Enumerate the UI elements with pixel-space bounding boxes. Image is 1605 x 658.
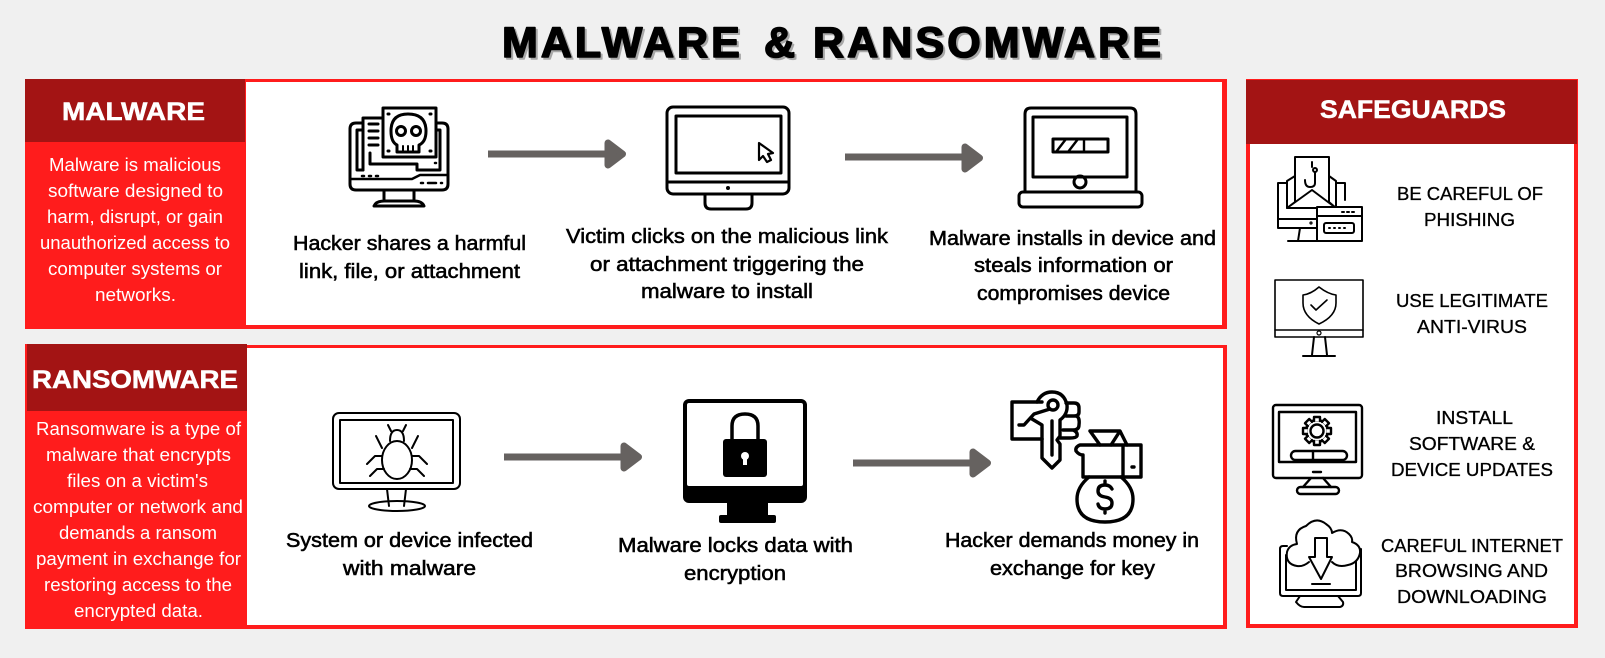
step text: ransomware 1: with malware <box>342 558 476 580</box>
step text: ransomware 2: Malware locks data with <box>618 535 853 557</box>
ransomware description box: Ransomware is a type of <box>36 419 242 439</box>
ransomware description box: restoring access to the <box>44 575 232 595</box>
text: be careful of phishing: PHISHING <box>1424 210 1515 230</box>
malware description box: computer systems or <box>48 259 222 279</box>
ransomware description box: demands a ransom <box>59 523 217 543</box>
ransomware description box <box>25 344 247 629</box>
ransomware description box: computer or network and <box>33 497 243 517</box>
icon: cloud download monitor <box>1280 520 1361 607</box>
step text: malware 3: compromises device <box>977 283 1170 305</box>
text: install software and updates: INSTALL <box>1436 408 1513 428</box>
icon: lock on monitor <box>683 399 807 523</box>
icon: shield monitor <box>1275 280 1363 356</box>
step text: ransomware 3 <box>945 530 1199 580</box>
step text: ransomware 2 <box>618 535 853 585</box>
safeguards heading <box>1246 80 1577 144</box>
icon: skull on monitor <box>350 108 448 206</box>
malware steps frame <box>244 79 1227 329</box>
ransomware description box: encrypted data. <box>74 601 203 621</box>
text: use legitimate anti-virus <box>1396 291 1548 337</box>
step text: malware 2: or attachment triggering the <box>590 254 864 276</box>
step text: malware 1 <box>293 233 526 283</box>
malware description box <box>25 79 245 329</box>
text: careful browsing and downloading: BROWSING AND <box>1395 561 1548 581</box>
text: careful browsing and downloading: CAREFUL INTERNET <box>1381 536 1563 556</box>
text: use legitimate anti-virus: ANTI-VIRUS <box>1417 317 1527 337</box>
arrow 4 <box>853 452 988 474</box>
panel: malware <box>25 79 1227 329</box>
icon: phishing <box>1278 157 1362 241</box>
malware description box: MALWARE <box>62 98 205 126</box>
step text: malware 3 <box>929 228 1216 305</box>
malware description box: networks. <box>95 285 176 305</box>
text: install software and updates <box>1391 408 1553 480</box>
text: be careful of phishing: BE CAREFUL OF <box>1397 184 1543 204</box>
malware description box: software designed to <box>48 181 223 201</box>
malware description box: harm, disrupt, or gain <box>47 207 223 227</box>
step text: malware 1: Hacker shares a harmful <box>293 233 526 255</box>
step text: malware 2 <box>566 226 889 303</box>
step text: malware 2: malware to install <box>641 281 813 303</box>
step text: malware 3: Malware installs in device and <box>929 228 1216 250</box>
ransomware description box: RANSOMWARE <box>32 366 238 394</box>
title: MALWARE <box>502 19 743 67</box>
ransomware steps frame <box>246 345 1227 629</box>
step text: ransomware 3: exchange for key <box>990 558 1155 580</box>
text: be careful of phishing <box>1397 184 1543 230</box>
step text: ransomware 1: System or device infected <box>286 530 533 552</box>
title: RANSOMWARE <box>813 19 1164 67</box>
ransomware description box: files on a victim's <box>67 471 208 491</box>
text: careful browsing and downloading <box>1381 536 1563 607</box>
safeguards heading: SAFEGUARDS <box>1320 96 1506 124</box>
step text: malware 3: steals information or <box>974 255 1173 277</box>
step text: ransomware 3: Hacker demands money in <box>945 530 1199 552</box>
panel: safeguards <box>1246 79 1578 628</box>
step text: ransomware 2: encryption <box>684 563 786 585</box>
panel: ransomware <box>25 344 1227 629</box>
icon: key and money bag <box>1012 392 1141 522</box>
text: install software and updates: DEVICE UPDATES <box>1391 460 1553 480</box>
step text: malware 1: link, file, or attachment <box>299 261 520 283</box>
ransomware description box: malware that encrypts <box>46 445 231 465</box>
step text: ransomware 1 <box>286 530 533 580</box>
icon: monitor with cursor <box>667 107 789 209</box>
text: install software and updates: SOFTWARE & <box>1409 434 1535 454</box>
arrow 1 <box>488 143 622 165</box>
ransomware description box: payment in exchange for <box>36 549 241 569</box>
icon: laptop with progress bar <box>1019 108 1142 207</box>
arrow 2 <box>845 147 980 169</box>
text: careful browsing and downloading: DOWNLOADING <box>1397 587 1547 607</box>
malware description box: unauthorized access to <box>40 233 230 253</box>
step text: malware 2: Victim clicks on the malicious link <box>566 226 889 248</box>
arrow 3 <box>504 446 638 468</box>
icon: bug on monitor <box>333 413 460 511</box>
malware description box: Malware is malicious <box>49 155 221 175</box>
icon: gear monitor <box>1273 405 1362 494</box>
text: use legitimate anti-virus: USE LEGITIMATE <box>1396 291 1548 311</box>
title: & <box>764 19 798 67</box>
